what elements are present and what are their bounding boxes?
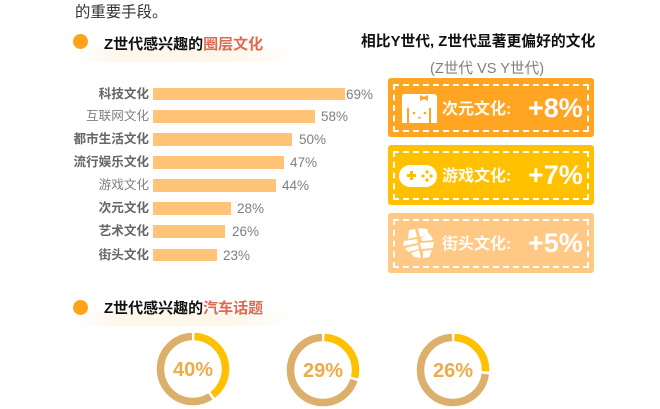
bar chart: circle culture interest: 都市生活文化 [73, 132, 149, 146]
card: gaming culture: 游戏文化: [442, 168, 511, 185]
bar chart: circle culture interest: 艺术文化 [99, 224, 149, 238]
donut chart: 29% [286, 334, 360, 406]
card: street culture: 街头文化: [442, 236, 511, 253]
bar chart: circle culture interest: 科技文化 [99, 87, 149, 101]
card: anime culture: +8% [528, 93, 583, 123]
heading: car topics [73, 300, 268, 326]
bar chart: circle culture interest: 互联网文化 [86, 109, 149, 123]
bar chart: circle culture interest: 次元文化 [99, 201, 149, 215]
bar chart: circle culture interest: 流行娱乐文化 [73, 155, 149, 169]
bar chart: circle culture interest: 26% [232, 224, 259, 239]
intro text: 的重要手段。 [75, 4, 167, 21]
bar chart: circle culture interest [73, 87, 373, 263]
donut chart: 40%: 40% [173, 359, 213, 381]
heading: compared with generation Y: 相比Y世代, Z世代显著更偏好的文化 [361, 34, 595, 50]
card: gaming culture [388, 145, 594, 205]
bar chart: circle culture interest: 44% [282, 178, 309, 193]
bar chart: circle culture interest: 47% [290, 155, 317, 170]
card: anime culture: 次元文化: [442, 101, 511, 118]
donut chart: 40% [156, 332, 230, 406]
card: gaming culture: +7% [528, 160, 583, 190]
bar chart: circle culture interest: 街头文化 [99, 248, 149, 262]
bar chart: circle culture interest: 69% [346, 87, 373, 102]
donut chart: 26%: 26% [433, 360, 473, 382]
bar chart: circle culture interest: 58% [321, 109, 348, 124]
card: street culture [388, 213, 594, 273]
donut chart: 26% [416, 334, 490, 406]
bar chart: circle culture interest: 游戏文化 [99, 178, 149, 192]
subheading: (Z世代 VS Y世代) [430, 61, 544, 77]
card: anime culture [388, 78, 594, 137]
heading: car topics: Z世代感兴趣的汽车话题 [104, 300, 263, 317]
icon: street pattern [403, 228, 434, 258]
donut chart: 29%: 29% [303, 360, 343, 382]
bar chart: circle culture interest: 50% [299, 132, 326, 147]
bar chart: circle culture interest: 28% [237, 201, 264, 216]
card: street culture: +5% [528, 228, 583, 258]
icon: anime character [402, 94, 437, 123]
heading: circle culture: Z世代感兴趣的圈层文化 [104, 36, 263, 53]
heading: circle culture [73, 34, 268, 62]
bar chart: circle culture interest: 23% [223, 248, 250, 263]
icon: game controller [399, 165, 437, 187]
